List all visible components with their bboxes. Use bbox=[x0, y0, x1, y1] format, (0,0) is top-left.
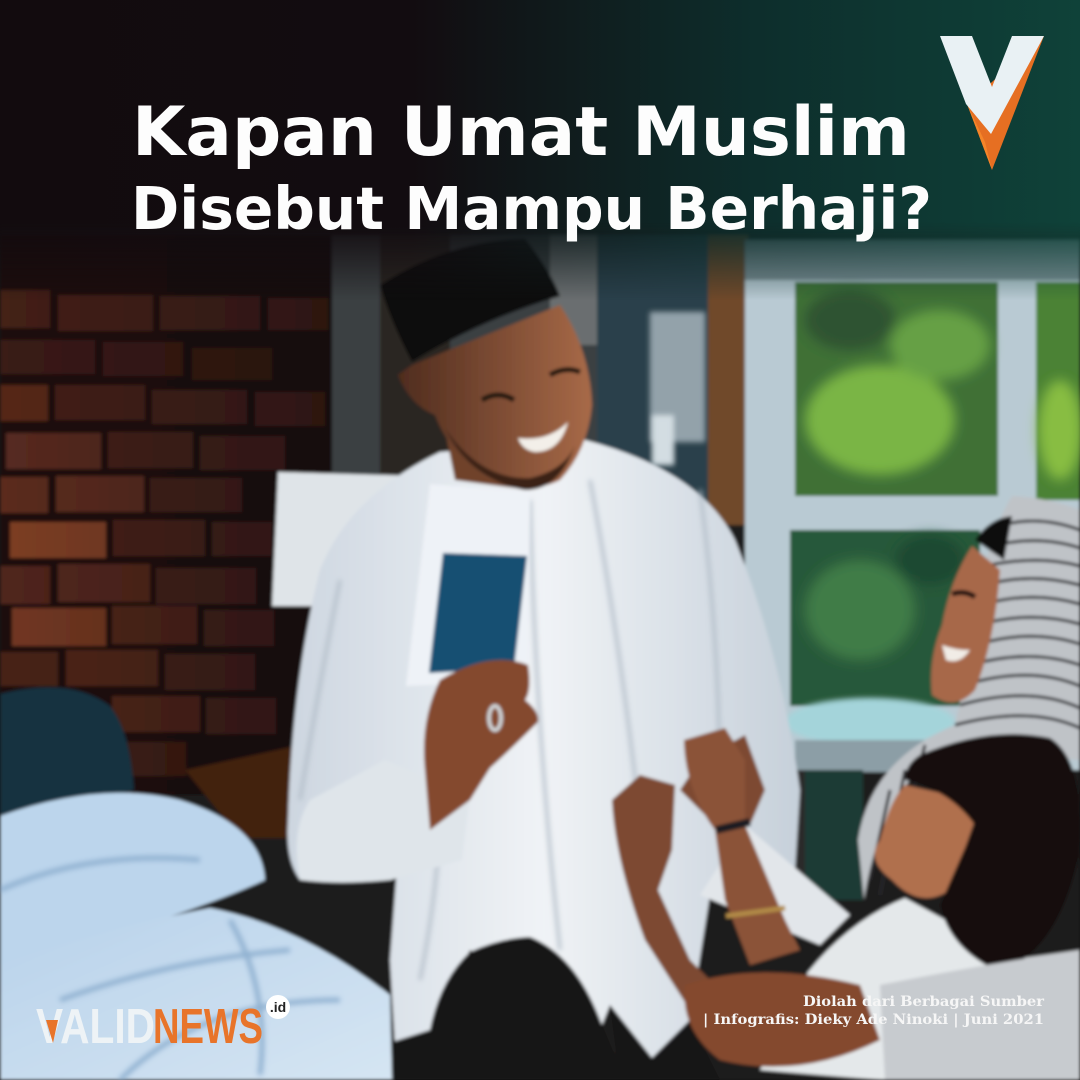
sleeve cuff bbox=[297, 760, 470, 882]
back wall and curtain bbox=[332, 235, 602, 495]
icon: V logo bbox=[940, 36, 1044, 170]
passport bbox=[429, 553, 527, 673]
hair bbox=[905, 734, 1080, 972]
credit text: Diolah dari Berbagai Sumber bbox=[803, 994, 1045, 1010]
logo: Validnews.id: VALID bbox=[36, 1000, 155, 1054]
hand bbox=[424, 660, 538, 830]
person: father bbox=[288, 238, 800, 1080]
logo: Validnews.id: .id bbox=[270, 999, 286, 1015]
credit text bbox=[703, 994, 1045, 1028]
table outside bbox=[785, 698, 955, 746]
side table bbox=[185, 745, 300, 840]
envelope bbox=[406, 484, 530, 686]
header gradient bbox=[0, 0, 1080, 300]
credit text: | Infografis: Dieky Ade Ninoki | Juni 2021 bbox=[703, 1012, 1044, 1028]
mother's hand bbox=[684, 972, 880, 1067]
neck bbox=[445, 420, 575, 490]
robe bbox=[288, 440, 800, 1058]
cap bbox=[380, 238, 560, 362]
mother's fist bbox=[680, 735, 765, 825]
face bbox=[931, 546, 1000, 702]
hijab bbox=[858, 496, 1080, 900]
bed pillow and duvet bbox=[0, 793, 265, 968]
face bbox=[875, 785, 975, 898]
title bbox=[131, 93, 932, 243]
smile bbox=[518, 422, 568, 452]
face bbox=[398, 305, 592, 488]
title: Disebut Mampu Berhaji? bbox=[131, 174, 932, 243]
title: Kapan Umat Muslim bbox=[132, 93, 910, 172]
bracelet bbox=[716, 822, 750, 830]
trousers bbox=[392, 937, 625, 1080]
mother's arm sleeve bbox=[880, 950, 1080, 1080]
brick wall bbox=[0, 235, 335, 795]
ring bbox=[489, 706, 501, 730]
logo: Validnews.id: NEWS bbox=[153, 1000, 263, 1054]
dress bbox=[760, 898, 1080, 1080]
lamp bbox=[272, 472, 420, 606]
window frame bbox=[745, 240, 1080, 770]
raised arms bbox=[612, 775, 720, 1010]
beard bbox=[445, 428, 575, 490]
logo: Validnews.id bbox=[36, 995, 290, 1054]
person: daughter bbox=[612, 728, 1080, 1080]
eyes bbox=[482, 370, 580, 400]
mother's sleeve behind arms bbox=[700, 825, 850, 945]
headboard bbox=[0, 687, 134, 830]
person: mother bbox=[858, 496, 1080, 900]
